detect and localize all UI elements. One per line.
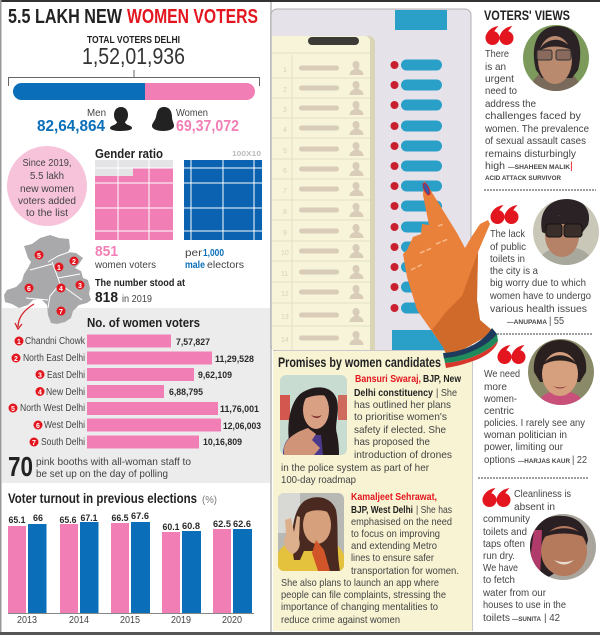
bar chart: number of women voters: West Delhi — [44, 420, 85, 431]
text: Bansuri Swaraj promise: BJP, New — [423, 373, 462, 385]
bar chart: number of women voters: 5 — [11, 406, 15, 413]
2019 ratio note: The number stood at — [95, 277, 185, 289]
quote text: —SHAHEEN MALIK — [508, 165, 571, 171]
quote text: toilets in — [490, 253, 525, 265]
men count — [37, 108, 106, 135]
quote text: —SUNITA — [512, 617, 542, 623]
icon: quote mark — [486, 26, 514, 45]
icon: quote mark — [498, 345, 526, 364]
title: WOMEN VOTERS — [127, 6, 258, 28]
ratio labels: electors — [207, 260, 244, 271]
ballot sheet: 9 — [283, 230, 287, 237]
map of Delhi constituencies: 2 — [72, 259, 76, 266]
text: Kamaljeet Sehrawat promise: She also plans to launch an app where — [281, 577, 439, 589]
2019 ratio note: in 2019 — [122, 294, 152, 305]
arrow: map to list — [15, 304, 34, 329]
bar chart: number of women voters: 1 — [17, 339, 21, 346]
icon: voting hand — [403, 181, 498, 368]
icon: quote mark — [490, 205, 518, 224]
quote text: is an — [485, 61, 506, 73]
bar chart: number of women voters: 6 — [36, 423, 40, 430]
quote: Shaheen Malik — [484, 25, 589, 182]
bar chart: number of women voters: South Delhi — [41, 437, 85, 448]
callout: since 2019: to the list — [26, 208, 68, 219]
women count: 69,37,072 — [176, 118, 239, 135]
text: Kamaljeet Sehrawat promise: reduce crime against women — [281, 614, 400, 626]
ballot sheet: 2 — [283, 87, 287, 94]
quote text: women have to undergo — [489, 290, 591, 302]
quote text: The lack — [490, 228, 526, 240]
bar chart: voter turnout — [8, 511, 254, 626]
quote text: Cleanliness is — [514, 488, 571, 500]
bar chart: number of women voters: 10,16,809 — [203, 437, 242, 448]
text: Kamaljeet Sehrawat promise: transportation for women. — [351, 565, 459, 577]
ballot sheet — [272, 36, 375, 350]
text: Bansuri Swaraj promise: in the police system as part of her — [281, 462, 429, 474]
quote text: | 22 — [572, 454, 587, 466]
bar chart: number of women voters: New Delhi — [46, 387, 85, 398]
text: Kamaljeet Sehrawat promise: lines to ensure safer — [351, 552, 434, 564]
quote text: power, limiting our — [484, 441, 563, 453]
chart: male electors grid — [184, 160, 262, 240]
chart: women voters grid — [95, 160, 173, 240]
map of Delhi constituencies: 6 — [27, 286, 31, 293]
text: Kamaljeet Sehrawat promise: importance of changing mentalities to — [281, 601, 438, 613]
bar chart: number of women voters: 2 — [14, 356, 18, 363]
quote text: of sexual assault cases — [485, 135, 586, 147]
quote text: toilets and — [483, 526, 527, 538]
photo: Shaheen Malik — [523, 25, 589, 91]
wavy divider — [497, 333, 593, 335]
photo: Kamaljeet Sehrawat — [278, 493, 344, 571]
quote text: more — [484, 381, 507, 393]
bar chart: voter turnout: 60.8 — [182, 521, 200, 532]
quote text: centric — [484, 405, 514, 417]
bar chart: number of women voters: Chandni Chowk — [25, 336, 86, 347]
text: Bansuri Swaraj promise — [281, 373, 462, 486]
quote text: absent in — [514, 501, 555, 513]
ballot sheet: 11 — [281, 271, 288, 278]
bar chart: voter turnout: 65.1 — [8, 515, 26, 526]
icon: quote mark — [482, 488, 510, 507]
pink booths note: be set up on the day of polling — [36, 468, 168, 480]
text: Kamaljeet Sehrawat promise: | She has — [416, 504, 452, 516]
quote text: big worry due to which — [490, 277, 586, 289]
2019 ratio note: 818 — [95, 289, 118, 306]
quote text: | — [570, 160, 573, 172]
bar chart: number of women voters: East Delhi — [47, 370, 85, 381]
quote text — [483, 368, 587, 466]
ratio labels: 1,000 — [203, 248, 224, 259]
ballot sheet: 6 — [283, 168, 287, 175]
bar chart: voter turnout: 2019 — [171, 615, 191, 626]
panel: women voters by constituency — [2, 308, 270, 483]
map of Delhi constituencies — [4, 235, 91, 324]
men count: 82,64,864 — [37, 118, 105, 135]
panel: promises by women candidates — [273, 351, 472, 631]
callout: since 2019: voters added — [18, 196, 76, 207]
quote: Harjas Kaur — [483, 339, 594, 466]
quote text: toilets — [483, 612, 510, 624]
quote text: challenges faced by — [485, 110, 582, 122]
quote text: options — [484, 454, 515, 466]
bar chart: voter turnout: 66 — [33, 513, 43, 524]
text: Bansuri Swaraj promise: introduction of drones — [354, 449, 452, 461]
text: Kamaljeet Sehrawat promise: to focus on improving — [351, 528, 440, 540]
quote text: of public — [490, 241, 526, 253]
quote text: —ANUPAMA — [507, 320, 548, 326]
text: Kamaljeet Sehrawat promise: and extending Metro — [351, 540, 437, 552]
bar chart: number of women voters: 4 — [38, 390, 42, 396]
bar chart: number of women voters: 3 — [38, 372, 42, 380]
quote: Sunita — [482, 488, 596, 624]
women count: Women — [176, 108, 208, 119]
text: Bansuri Swaraj promise: 100-day roadmap — [281, 474, 356, 486]
quote text: woman politician in — [483, 429, 567, 441]
quote text: women- — [483, 393, 517, 405]
photo: Anupama — [533, 199, 599, 265]
heading: no. of women voters: No. of women voters — [87, 315, 200, 330]
map of Delhi constituencies: 3 — [78, 283, 82, 290]
map of Delhi constituencies: 7 — [59, 309, 63, 316]
bar chart: voter turnout: 2013 — [17, 615, 37, 626]
pink booths note: 70 — [8, 451, 33, 482]
ballot sheet: 8 — [283, 209, 287, 216]
total voters figure: 1,52,01,936 — [82, 43, 185, 69]
quote text: water from our — [482, 587, 546, 599]
text: Kamaljeet Sehrawat promise: BJP, West Delhi — [351, 504, 413, 516]
ballot sheet: 13 — [281, 314, 289, 321]
quote text: community — [483, 513, 531, 525]
ratio labels — [94, 243, 244, 271]
ratio labels: per — [185, 248, 203, 259]
text: Bansuri Swaraj promise: has proposed the — [354, 436, 430, 448]
text: Kamaljeet Sehrawat promise: people can file complaints, stressing the — [281, 589, 446, 601]
text: Bansuri Swaraj promise: to prioritise women's — [354, 411, 447, 423]
quote text: need to — [485, 85, 517, 97]
bar chart: voter turnout: 2015 — [120, 615, 140, 626]
quote text — [484, 48, 589, 182]
icon: woman — [152, 107, 174, 131]
ballot sheet: 10 — [281, 250, 289, 257]
quote text: run dry. — [483, 550, 515, 562]
bar chart: voter turnout: 62.6 — [233, 519, 251, 530]
photo: Harjas Kaur — [528, 339, 594, 405]
ballot sheet: 5 — [283, 148, 287, 155]
quote text: women. The prevalence — [484, 123, 589, 135]
heading: gender ratio: 100X10 — [232, 151, 261, 158]
men count: Men — [87, 108, 106, 119]
bar chart: number of women voters: 7,57,827 — [176, 337, 210, 348]
pink booths note — [8, 451, 191, 482]
quote text: We have — [483, 562, 518, 574]
photo: Sunita — [530, 514, 596, 580]
bar chart: voter turnout: 62.5 — [213, 519, 232, 530]
bar chart: number of women voters — [8, 315, 261, 448]
quote text: the city is a — [490, 265, 538, 277]
heading: gender ratio — [95, 146, 261, 161]
wavy divider — [484, 189, 596, 191]
heading: voter turnout: (%) — [202, 495, 217, 506]
ratio labels: women voters — [94, 260, 156, 271]
ballot sheet: 1 — [283, 67, 287, 74]
quote text: | 55 — [549, 315, 564, 327]
icon: man — [110, 107, 132, 131]
bar chart: number of women voters: North West Delhi — [20, 403, 85, 414]
quote text: address the — [485, 98, 536, 110]
heading: voter turnout: Voter turnout in previous elections — [8, 490, 197, 506]
voting buttons — [390, 60, 442, 314]
bar chart: number of women voters: 11,76,001 — [220, 404, 260, 415]
quote text: urgent — [485, 73, 514, 85]
callout: since 2019 — [7, 146, 87, 226]
heading: voters' views: VOTERS' VIEWS — [484, 8, 570, 23]
panel: voting machine — [271, 9, 471, 351]
title: 5.5 LAKH NEW — [8, 6, 122, 28]
bar chart: number of women voters: 12,06,003 — [223, 421, 261, 432]
bar chart: number of women voters: North East Delhi — [23, 353, 85, 364]
2019 ratio note — [95, 277, 185, 306]
map of Delhi constituencies: 4 — [59, 286, 63, 293]
wristband — [443, 328, 498, 368]
quote: Anupama — [489, 199, 599, 327]
bar chart: number of women voters: 7 — [32, 440, 36, 447]
quote text: —HARJAS KAUR — [518, 459, 571, 465]
callout: since 2019: Since 2019, — [22, 158, 72, 169]
bar chart: voter turnout: 65.6 — [60, 515, 76, 526]
text: Bansuri Swaraj promise: | She — [436, 387, 457, 399]
bracket — [8, 70, 260, 86]
callout: since 2019: 5.5 lakh — [30, 171, 64, 182]
text: Bansuri Swaraj promise: Bansuri Swaraj, — [355, 373, 421, 385]
ratio labels: male — [185, 260, 205, 271]
ballot sheet: 14 — [281, 337, 289, 344]
heading: gender ratio: Gender ratio — [95, 146, 163, 161]
ratio labels: 851 — [95, 243, 118, 260]
title — [8, 6, 258, 28]
bar chart: number of women voters: 11,29,528 — [215, 354, 254, 365]
text: Bansuri Swaraj promise: safety if elected. She — [354, 424, 446, 436]
quote text: | 42 — [544, 612, 560, 624]
total voters figure — [82, 35, 185, 69]
bar chart: voter turnout: 2020 — [222, 615, 242, 626]
quote text: remains disturbingly — [485, 148, 577, 160]
pink booths note: pink booths with all-woman staff to — [36, 456, 191, 468]
bar chart: voter turnout: 66.5 — [112, 513, 129, 524]
quote text: taps often — [483, 538, 525, 550]
quote text: various health issues — [490, 303, 587, 315]
text: Kamaljeet Sehrawat promise: emphasised on the need — [351, 516, 452, 528]
quote text: policies. I rarely see any — [484, 417, 586, 429]
bar chart: voter turnout: 2014 — [69, 615, 89, 626]
bar chart: number of women voters: 9,62,109 — [198, 370, 232, 381]
ballot sheet: 3 — [283, 107, 287, 114]
photo: Bansuri Swaraj — [280, 375, 347, 455]
women count — [176, 108, 239, 135]
quote text: ACID ATTACK SURVIVOR — [485, 176, 562, 182]
quote text — [489, 228, 591, 327]
quote text: high — [485, 160, 505, 172]
map of Delhi constituencies: 5 — [37, 253, 41, 260]
quote text: There — [485, 48, 509, 60]
bar chart: voter turnout: 67.1 — [80, 513, 98, 524]
text: Kamaljeet Sehrawat promise: Kamaljeet Sehrawat, — [351, 491, 437, 503]
men and women share bar — [13, 83, 255, 100]
ballot sheet: 4 — [283, 127, 287, 134]
ballot sheet: 7 — [283, 188, 287, 195]
bar chart: voter turnout: 67.6 — [131, 511, 149, 522]
text: Kamaljeet Sehrawat promise — [281, 491, 459, 626]
heading: promises: Promises by women candidates — [278, 354, 441, 370]
map of Delhi constituencies: 1 — [57, 265, 61, 272]
text: Bansuri Swaraj promise: has outlined her plans — [354, 399, 451, 411]
bar chart: voter turnout: 60.1 — [162, 522, 180, 533]
wavy divider — [478, 477, 589, 479]
bar chart: number of women voters: 6,88,795 — [169, 387, 204, 398]
quote text — [482, 488, 571, 624]
quote text: houses to use in the — [483, 599, 566, 611]
quote text: to fetch — [483, 574, 515, 586]
total voters figure: TOTAL VOTERS DELHI — [87, 35, 180, 46]
quote text: We need — [484, 368, 520, 380]
callout: since 2019: new women — [20, 184, 74, 195]
text: Bansuri Swaraj promise: Delhi constituency — [354, 387, 433, 399]
ballot sheet: 12 — [281, 291, 289, 298]
